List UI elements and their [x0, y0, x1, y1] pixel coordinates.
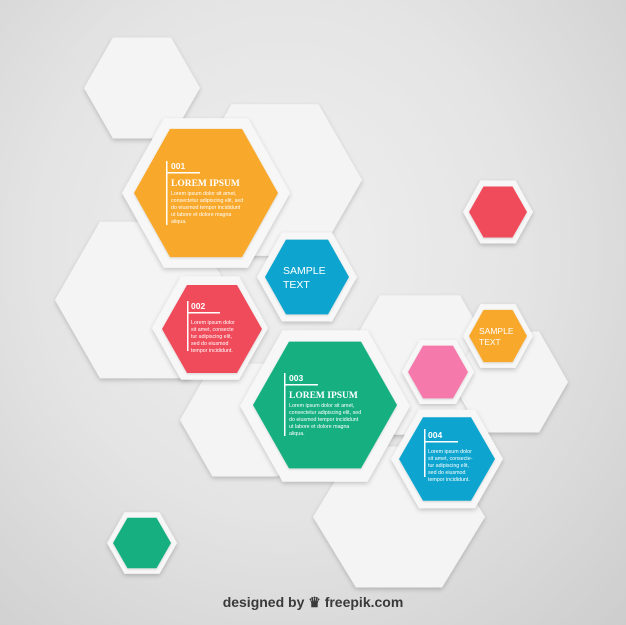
background hexagon bottom — [313, 446, 485, 588]
hexagon sample text blue: TEXT — [283, 279, 310, 291]
hexagon 001 orange: LOREM IPSUM — [171, 179, 240, 189]
hexagon sample text blue: SAMPLE — [283, 265, 326, 277]
hexagon 001 orange: 001 — [171, 161, 185, 171]
hexagon 004 blue: sit amet, consecte- — [428, 456, 473, 462]
background hexagon left large — [55, 222, 235, 378]
background hexagon top-left — [84, 38, 200, 138]
footer credit: designed by ♛ freepik.com — [223, 594, 403, 610]
hexagon pink — [402, 340, 474, 404]
hexagon sample text blue — [257, 232, 357, 322]
hexagon 003 green: consectetur adipiscing elit, sed — [289, 410, 361, 416]
hexagon 002 red: tempor incididunt. — [191, 348, 233, 354]
hexagon 004 blue: tempor incididunt. — [428, 477, 470, 483]
hexagon 003 green: ut labore et dolore magna — [289, 424, 349, 430]
hexagon 001 orange: consectetur adipiscing elit, sed — [171, 198, 243, 204]
hexagon 002 red: Lorem ipsum dolor — [191, 320, 235, 326]
hexagon 003 green: LOREM IPSUM — [289, 391, 358, 401]
hexagon 003 green — [240, 330, 410, 482]
hexagon 001 orange: aliqua. — [171, 219, 187, 225]
background hexagon middle right — [340, 295, 500, 435]
background hexagon lower left — [180, 363, 310, 477]
hexagon 001 orange: ut labore et dolore magna — [171, 212, 231, 218]
hexagon 003 green: do eiusmod tempor incididunt — [289, 417, 359, 423]
hexagon 001 orange — [122, 118, 290, 268]
hexagon sample text orange small — [463, 304, 533, 368]
background hexagon behind orange — [188, 104, 362, 256]
hexagon red top-right — [463, 180, 533, 244]
hexagon 001 orange: Lorem ipsum dolor sit amet, — [171, 191, 236, 197]
hexagon sample text orange small: TEXT — [479, 337, 501, 347]
hexagon 004 blue: tur adipiscing elit, — [428, 463, 469, 469]
hexagon 004 blue — [391, 410, 503, 508]
hexagon 002 red — [152, 276, 268, 380]
hexagon 001 orange: do eiusmod tempor incididunt — [171, 205, 241, 211]
hexagon sample text orange small: SAMPLE — [479, 326, 514, 336]
hexagon 002 red: sed do eiusmod — [191, 341, 228, 347]
hexagon 002 red: sit amet, consecte — [191, 327, 234, 333]
hexagon 003 green: 003 — [289, 373, 303, 383]
hexagon 004 blue: Lorem ipsum dolor — [428, 449, 472, 455]
background hexagon far right — [452, 332, 568, 432]
hexagon 004 blue: 004 — [428, 430, 442, 440]
hexagon 004 blue: sed do eiusmod — [428, 470, 465, 476]
hexagon 002 red: 002 — [191, 301, 205, 311]
hexagon 003 green: aliqua. — [289, 431, 305, 437]
hexagon 003 green: Lorem ipsum dolor sit amet, — [289, 403, 354, 409]
hexagon green bottom-left — [107, 512, 177, 574]
hexagon 002 red: tur adipiscing elit, — [191, 334, 232, 340]
